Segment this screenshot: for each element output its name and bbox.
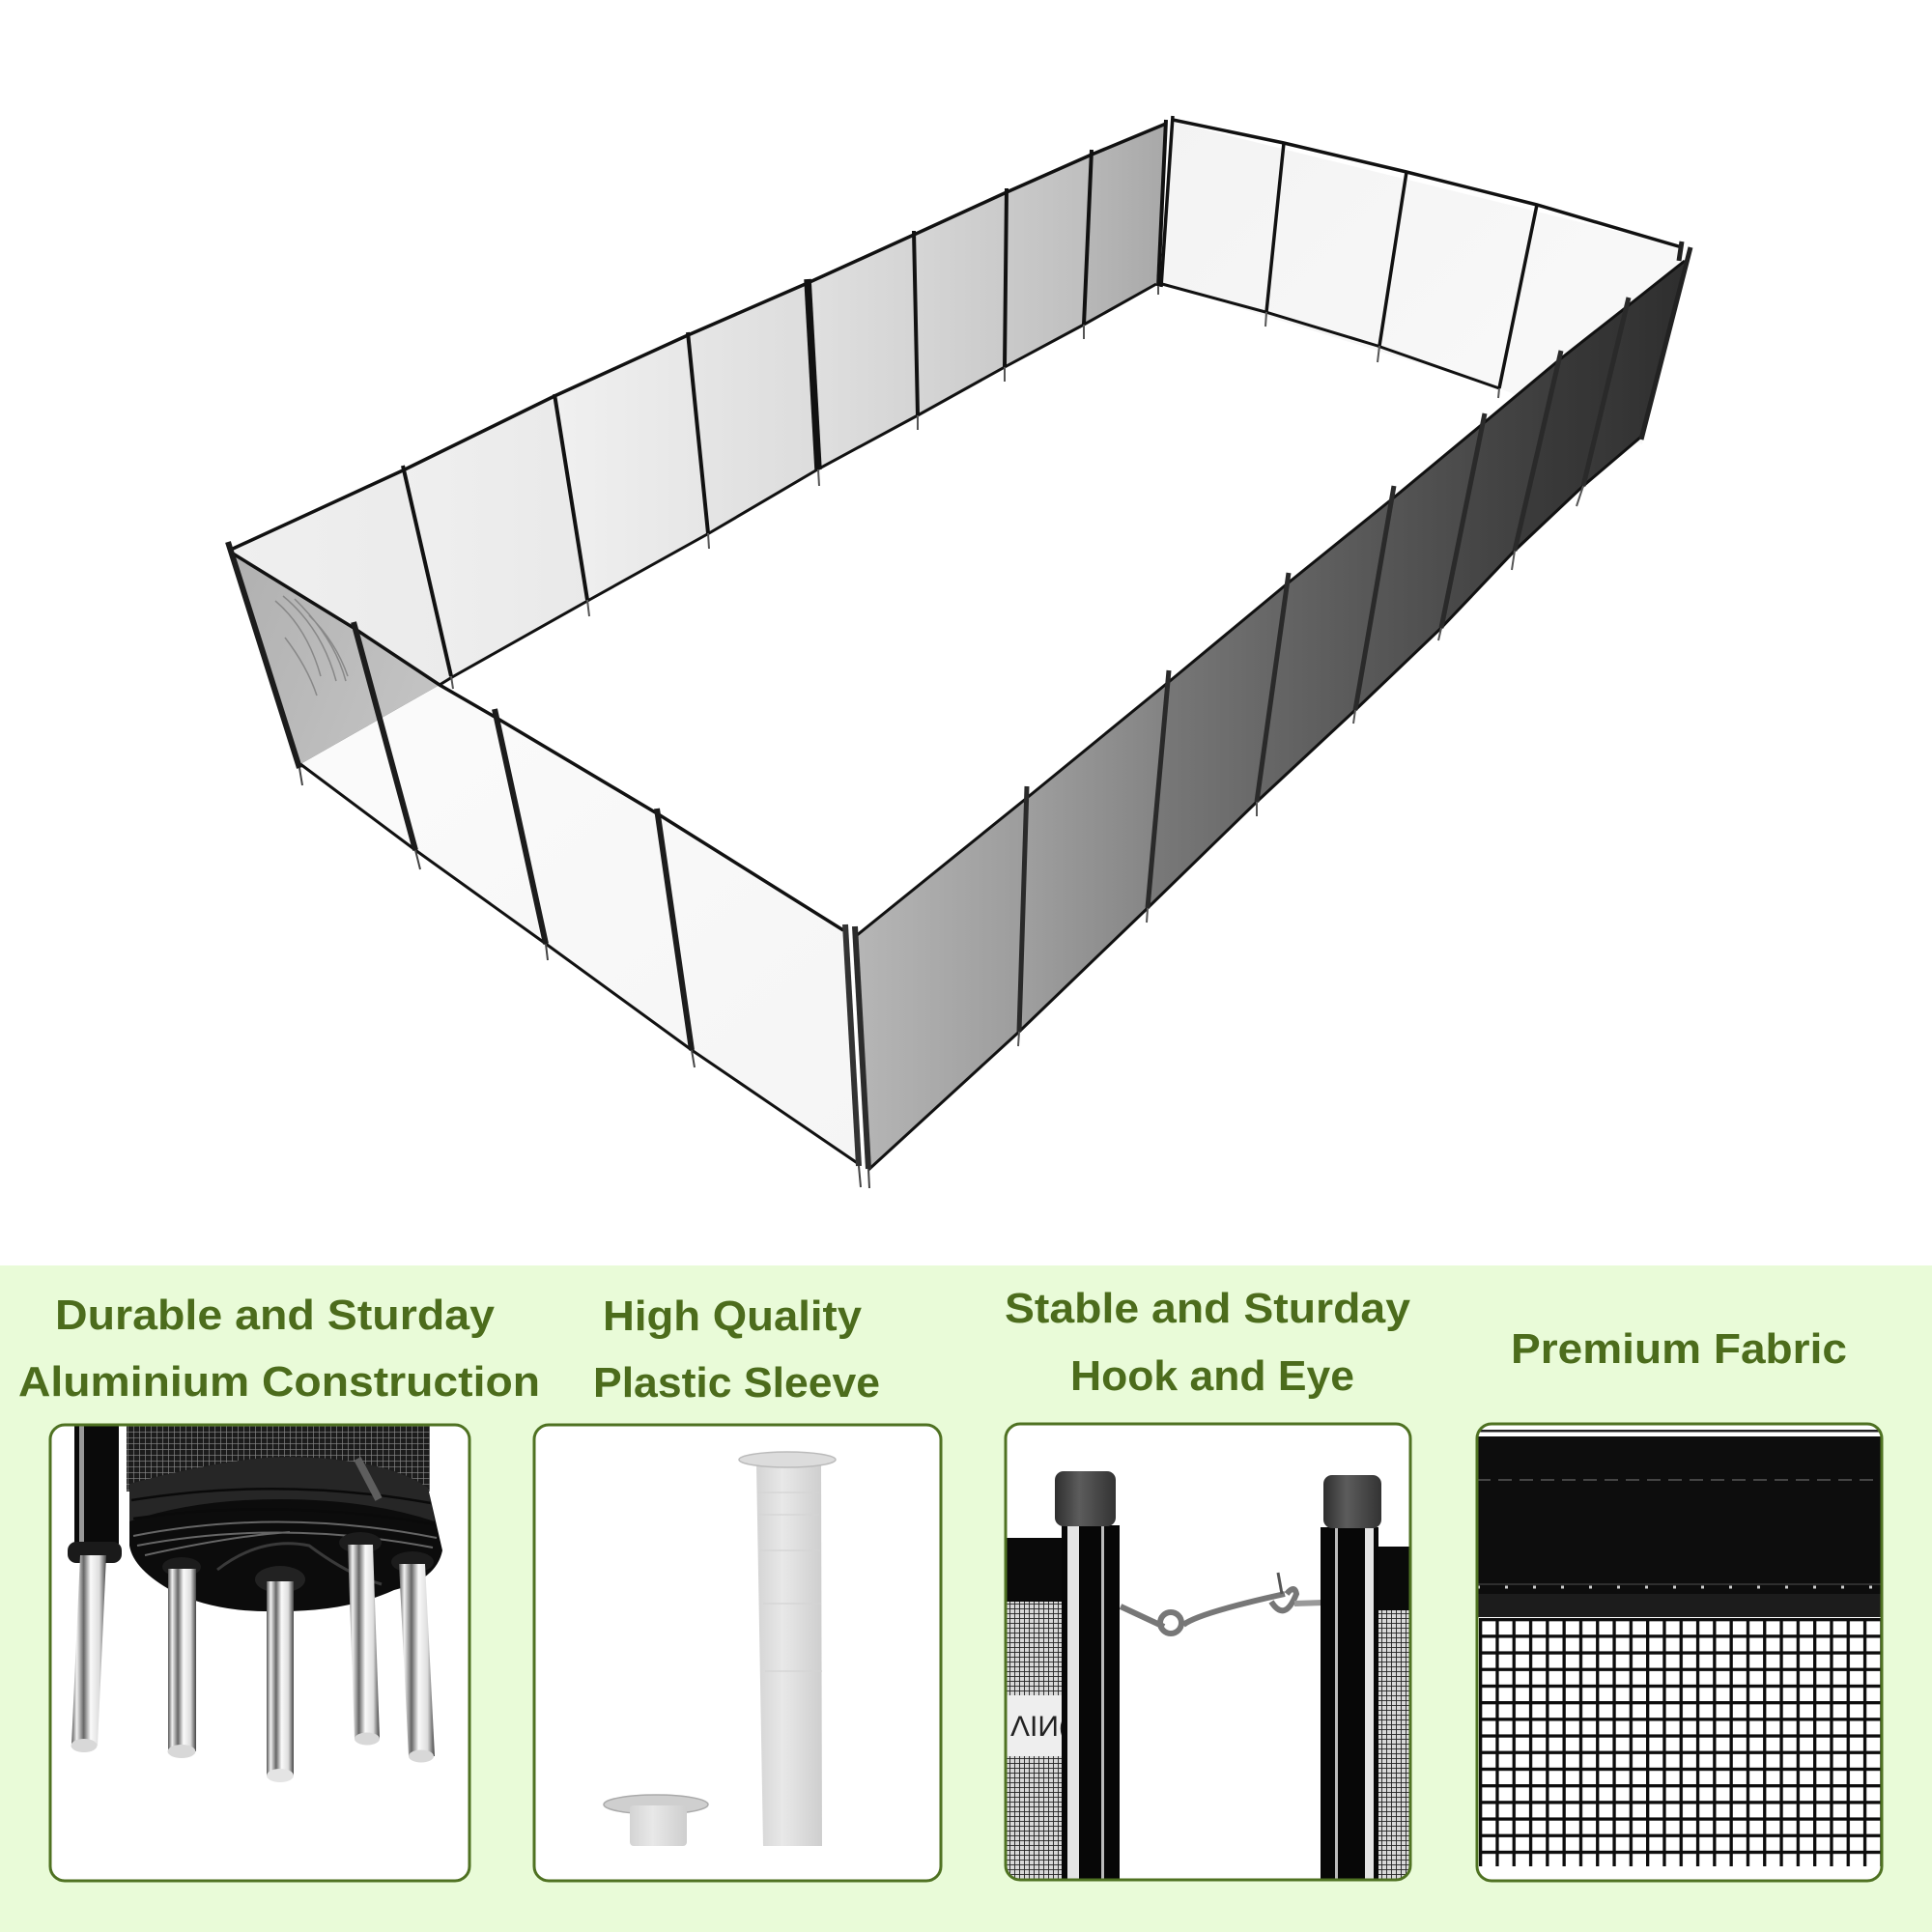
left end wall with moire xyxy=(233,554,440,764)
front fence wall xyxy=(228,542,861,1187)
right fence section xyxy=(1378,1547,1410,1882)
heading: hook and eye xyxy=(1005,1285,1411,1400)
icon: right post xyxy=(1321,1475,1381,1883)
heading: aluminium construction: Aluminium Construction xyxy=(18,1358,540,1406)
left fence section with label: ΛIИ( xyxy=(1010,1711,1068,1743)
icon: plastic cap xyxy=(604,1795,708,1846)
icon: hook and eye xyxy=(1121,1573,1323,1634)
back-right fence wall xyxy=(1161,116,1682,444)
left fence section with label xyxy=(1007,1538,1062,1878)
icon: black pole xyxy=(68,1424,122,1563)
heading: hook and eye: Hook and Eye xyxy=(1070,1352,1354,1400)
heading: plastic sleeve: High Quality xyxy=(603,1293,863,1340)
back-left fence wall xyxy=(233,120,1166,764)
heading: plastic sleeve: Plastic Sleeve xyxy=(593,1359,880,1406)
black fabric binding with stitching xyxy=(1477,1430,1883,1617)
fence product illustration xyxy=(228,116,1690,1188)
panel: plastic sleeve xyxy=(534,1425,941,1881)
heading: plastic sleeve xyxy=(593,1293,880,1406)
icon: plastic sleeve tube xyxy=(739,1452,836,1846)
heading: aluminium construction: Durable and Sturday xyxy=(55,1292,496,1339)
heading: premium fabric: Premium Fabric xyxy=(1511,1325,1847,1373)
dark near-side fence wall xyxy=(855,242,1690,1188)
icon: rolled mesh fence xyxy=(127,1424,442,1611)
bottom feature band xyxy=(0,1265,1932,1932)
panel: hook and eye xyxy=(1006,1424,1410,1883)
panel: premium fabric xyxy=(1477,1424,1883,1881)
mesh fabric grid xyxy=(1479,1618,1882,1866)
heading: aluminium construction xyxy=(18,1292,540,1406)
panel: aluminium poles xyxy=(50,1424,469,1881)
heading: hook and eye: Stable and Sturday xyxy=(1005,1285,1411,1332)
icon: metal rods xyxy=(71,1532,435,1782)
icon: left post xyxy=(1055,1471,1120,1883)
